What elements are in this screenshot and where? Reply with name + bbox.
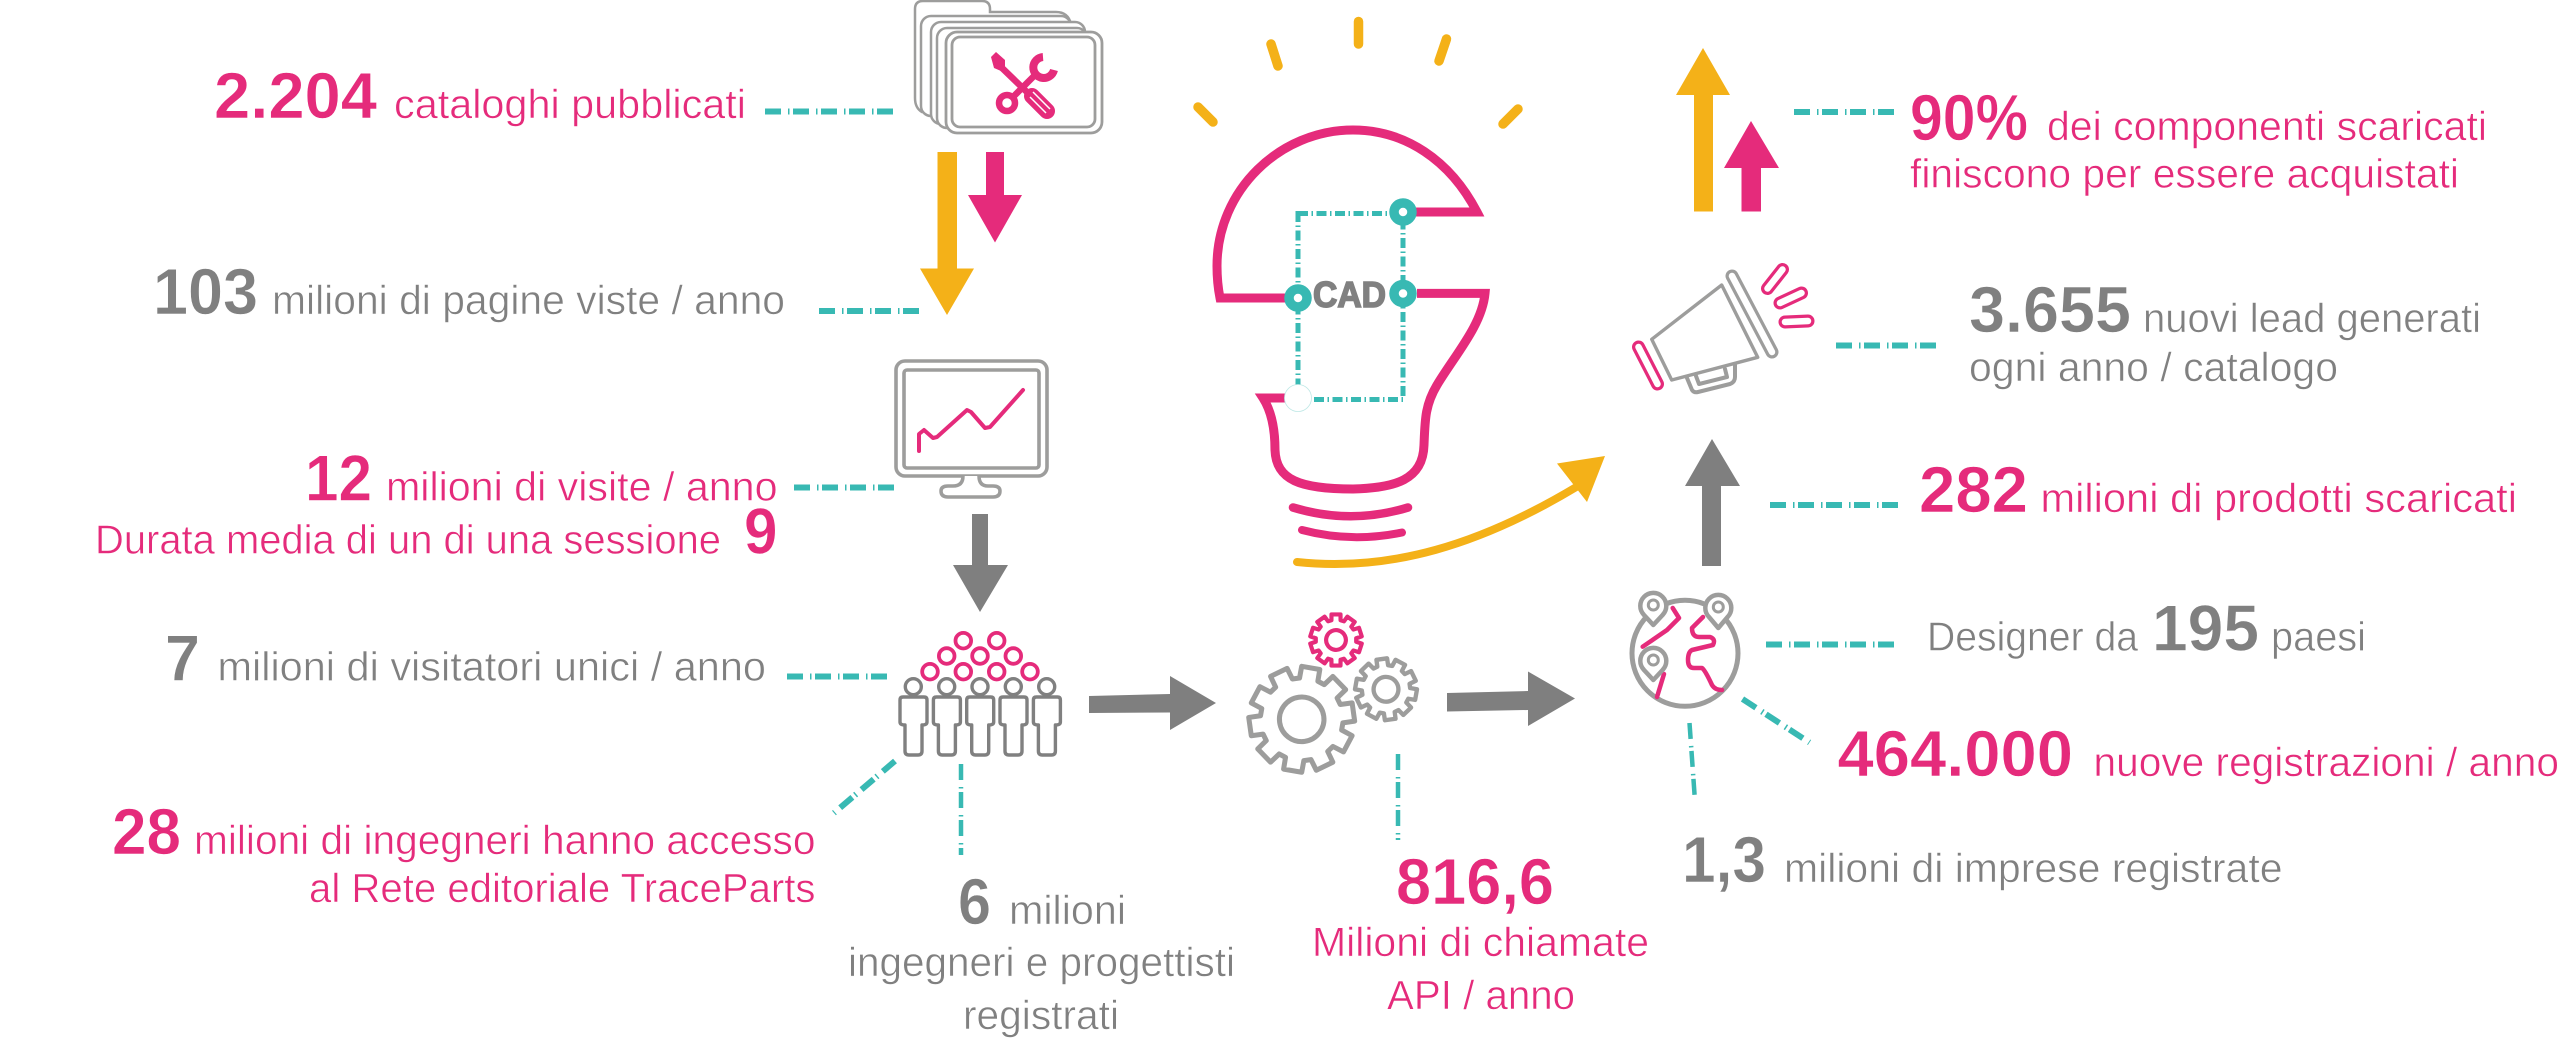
- arrow: gray right 2: [1447, 672, 1575, 726]
- stat: componenti acquistati: 90%: [1910, 81, 2028, 154]
- stat: cataloghi pubblicati: cataloghi pubblicati: [394, 81, 746, 127]
- stat: durata sessione: [95, 494, 778, 568]
- megaphone sound bars: [1638, 270, 1808, 384]
- arrow: yellow down: [920, 152, 974, 315]
- stat: visite: milioni di visite / anno: [386, 464, 778, 510]
- stat: nuovi lead: [1969, 273, 2481, 390]
- dashed rectangle: [1298, 214, 1403, 400]
- arrow: pink down: [968, 152, 1022, 242]
- bulb outline top: [1217, 130, 1477, 298]
- connector: pagine viste: [819, 308, 919, 314]
- stat: prodotti scaricati: milioni di prodotti scaricati: [2040, 475, 2517, 521]
- bulb outline bottom: [1263, 293, 1485, 489]
- icon: gears: [1243, 608, 1421, 779]
- connector: designer: [1766, 642, 1896, 648]
- stat: imprese registrate: milioni di imprese registrate: [1784, 845, 2282, 891]
- connector: cataloghi: [765, 108, 893, 114]
- icon: catalog folders with tools: [915, 1, 1102, 133]
- stat: prodotti scaricati: [1919, 453, 2517, 526]
- stat: nuovi lead: ogni anno / catalogo: [1969, 344, 2338, 390]
- icon: monitor with chart: [896, 361, 1047, 497]
- stat: ingegneri con accesso: al Rete editoriale TraceParts: [309, 865, 816, 911]
- gray people: [900, 679, 1060, 755]
- stat: ingegneri con accesso: milioni di ingegneri hanno accesso: [194, 817, 816, 863]
- stat: visitatori unici: milioni di visitatori unici / anno: [218, 644, 766, 690]
- teal nodes: [1289, 203, 1412, 307]
- bulb base lines: [1293, 508, 1408, 516]
- stat: durata sessione: Durata media di un di una sessione: [95, 516, 721, 562]
- connector: visitatori: [787, 674, 888, 680]
- stat: componenti acquistati: dei componenti scaricati: [2047, 103, 2487, 149]
- stat: pagine viste: milioni di pagine viste / anno: [272, 277, 785, 323]
- connector: visite: [794, 484, 894, 490]
- arrow: gray right 1: [1089, 676, 1216, 730]
- stat: nuove registrazioni: 464.000: [1838, 717, 2073, 790]
- icon: people group: [900, 633, 1060, 755]
- stat: nuove registrazioni: [1838, 717, 2559, 790]
- big gear: [1243, 660, 1361, 779]
- pink gear: [1304, 608, 1368, 672]
- stat: ingegneri registrati: 6: [958, 865, 991, 938]
- continents: [1643, 608, 1722, 697]
- stat: ingegneri con accesso: 28: [112, 795, 181, 868]
- icon: megaphone: [1638, 270, 1808, 392]
- stat: designer paesi: 195: [2152, 592, 2259, 664]
- arrow: gray up: [1685, 439, 1740, 566]
- connector: 90 percent: [1794, 109, 1896, 115]
- stat: ingegneri registrati: registrati: [963, 992, 1119, 1038]
- stat: pagine viste: [153, 255, 785, 328]
- rays: [1198, 22, 1518, 124]
- stat: cataloghi pubblicati: 2.204: [214, 59, 377, 132]
- stat: pagine viste: 103: [153, 255, 258, 328]
- arrow: gray down: [953, 514, 1008, 612]
- connector: prodotti: [1770, 502, 1900, 508]
- connector: registrazioni diagonal: [1742, 699, 1810, 742]
- map pins: [1640, 593, 1731, 680]
- icon: crossed tools: [991, 52, 1054, 113]
- pink heads: [922, 633, 1038, 680]
- connector: API vertical: [1396, 754, 1400, 840]
- stat: visitatori unici: [165, 622, 766, 694]
- stat: nuovi lead: 3.655: [1969, 273, 2131, 346]
- icon: globe with pins: [1632, 593, 1738, 706]
- stat: ingegneri registrati: milioni: [1009, 887, 1126, 933]
- CAD label: CAD: [1313, 274, 1386, 315]
- connector: ingegneri diagonal: [834, 761, 895, 813]
- arrow: yellow up: [1676, 48, 1730, 212]
- stat: designer paesi: Designer da: [1927, 614, 2138, 660]
- arrow: pink up: [1724, 121, 1779, 212]
- connector: imprese vertical: [1690, 723, 1695, 801]
- stat: visite: 12: [305, 442, 372, 514]
- medium gear: [1351, 654, 1421, 725]
- stat: chiamate API: Milioni di chiamate: [1312, 919, 1649, 965]
- stat: ingegneri registrati: ingegneri e progettisti: [848, 939, 1235, 985]
- stat: chiamate API: [1312, 845, 1649, 1018]
- white node: [1284, 384, 1312, 412]
- connector: lead: [1836, 342, 1943, 348]
- stat: prodotti scaricati: 282: [1919, 453, 2028, 526]
- stat: nuovi lead: nuovi lead generati: [2143, 295, 2481, 341]
- arrow: yellow curved: [1297, 456, 1605, 564]
- stat: cataloghi pubblicati: [214, 59, 746, 132]
- stat: chiamate API: API / anno: [1387, 972, 1575, 1018]
- stat: ingegneri con accesso: [112, 795, 816, 911]
- stat: ingegneri registrati: [848, 865, 1235, 1038]
- stat: designer paesi: paesi: [2271, 614, 2366, 660]
- stat: nuove registrazioni: nuove registrazioni / anno: [2094, 739, 2559, 785]
- chart line: [919, 390, 1023, 451]
- stat: componenti acquistati: finiscono per essere acquistati: [1910, 150, 2459, 196]
- stat: imprese registrate: 1,3: [1682, 823, 1766, 896]
- icon: CAD light bulb: [1198, 22, 1518, 537]
- stat: imprese registrate: [1682, 823, 2282, 896]
- stat: visite: [305, 442, 778, 514]
- stat: durata sessione: 9: [744, 494, 778, 568]
- stat: visitatori unici: 7: [165, 622, 200, 694]
- stat: designer paesi: [1927, 592, 2366, 664]
- connector: registrati vertical: [959, 764, 963, 855]
- stat: chiamate API: 816,6: [1396, 845, 1554, 918]
- stat: componenti acquistati: [1910, 81, 2487, 196]
